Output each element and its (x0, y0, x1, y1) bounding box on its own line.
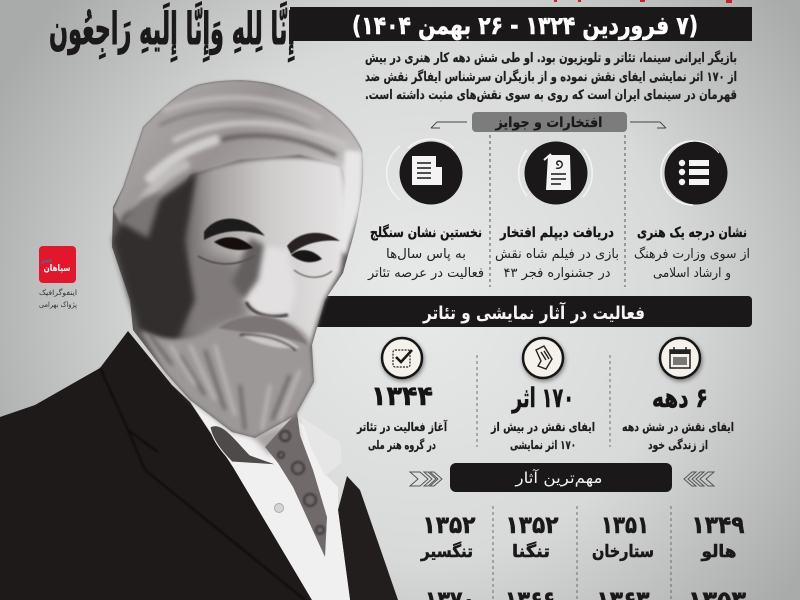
shirt (190, 400, 350, 600)
award description: بازی در فیلم شاه نقش (495, 247, 619, 262)
beard (140, 316, 314, 438)
award title: نشان درجه یک هنری (637, 225, 747, 241)
tiny red headline fragments (554, 0, 732, 3)
stat description: آغاز فعالیت در تئاتر (356, 419, 448, 434)
stat: 170 works (490, 338, 595, 452)
credit text: اینفوگرافیک (39, 288, 77, 297)
heading bar: key works: مهم‌ترین آثار (514, 469, 602, 487)
work: Tangsir: تنگسیر (420, 541, 473, 562)
work: Tangna (506, 511, 559, 562)
stat description: در گروه هنر ملی (368, 438, 436, 453)
icon: paper roll (387, 139, 462, 204)
face skin (160, 158, 345, 345)
work: Halo: ۱۳۴۹ (692, 511, 745, 539)
patterned tie (265, 412, 327, 557)
work: Tangsir: ۱۳۵۲ (422, 511, 476, 539)
calligraphy: condolence phrase: إِنَّا لِلهِ وَإِنَّا إِلَيهِ رَاجِعُون (49, 1, 295, 63)
logo: Sepahan Khabar (39, 246, 76, 283)
award description (495, 247, 619, 281)
icon: calendar (660, 338, 700, 378)
work: Tangna: تنگنا (512, 541, 550, 562)
dark left side of head (113, 172, 197, 345)
stat value: ۶ دهه (652, 383, 708, 414)
stat description (622, 420, 734, 453)
logo: Sepahan Khabar: سپاهان (44, 264, 71, 274)
award description: در جشنواره فجر ۴۳ (504, 266, 611, 281)
arrow: awards left (431, 122, 467, 128)
heading: awards: افتخارات و جوایز (495, 115, 602, 131)
right eyebrow and eye (287, 233, 340, 277)
award: diploma of honor (495, 142, 619, 281)
icon: scroll (523, 338, 563, 378)
heading bar: theatre activity: فعالیت در آثار نمایشی و تئاتر (422, 301, 645, 324)
works: second row years (425, 586, 746, 600)
stat: start year (356, 338, 448, 453)
portrait of the actor (0, 80, 398, 600)
logo: Sepahan Khabar: خبر (40, 256, 53, 264)
stat value: ۱۷۰ اثر (511, 383, 574, 414)
hair strands (136, 98, 345, 212)
arrow: awards right (630, 122, 666, 128)
head base (112, 80, 363, 438)
neck shadow (253, 420, 300, 455)
title bar with dates: (۷ فروردین ۱۳۲۴ - ۲۶ بهمن ۱۴۰۴) (352, 11, 698, 41)
hair (113, 80, 363, 240)
work: Setarkhan: ستارخان (592, 542, 654, 562)
stat value: ۱۳۴۴ (371, 381, 433, 412)
stat description (490, 420, 595, 452)
moustache and mouth (218, 316, 308, 350)
left eyebrow and eye (198, 219, 265, 264)
stat: six decades (622, 338, 734, 453)
work: Setarkhan (592, 511, 654, 562)
award description: و ارشاد اسلامی (653, 266, 731, 281)
award: art degree (634, 141, 750, 281)
work: Tangna: ۱۳۵۲ (506, 511, 559, 539)
award description: فعالیت در عرصه تئاتر (367, 266, 484, 281)
work: Halo (692, 511, 745, 562)
collar leaf (210, 426, 278, 465)
jacket right side (338, 476, 398, 600)
left cheek shading (185, 250, 250, 335)
stat description: ایفای نقش در بیش از (490, 420, 595, 434)
icon: document with quill (519, 142, 592, 204)
icon: list (661, 141, 728, 205)
button (274, 504, 284, 512)
award: Sangalaj medal (367, 139, 484, 281)
award title: دریافت دیپلم افتخار (499, 225, 614, 241)
award description: به پاس سال‌ها (386, 247, 466, 262)
icon: chevrons right (684, 472, 714, 486)
award title: نخستین نشان سنگلج (370, 224, 482, 241)
credit text: پژواک بهرامی (39, 300, 77, 309)
award description: از سوی وزارت فرهنگ (634, 246, 750, 262)
credit text (39, 288, 77, 309)
title bar with dates (290, 7, 752, 41)
biography paragraph (365, 50, 737, 103)
heading: awards (472, 112, 627, 132)
right temple hair (338, 150, 362, 255)
stat description: ایفای نقش در شش دهه (622, 420, 734, 434)
nose (232, 238, 296, 316)
work: Setarkhan: ۱۳۵۱ (601, 511, 649, 539)
heading bar: key works (450, 463, 672, 492)
award description (634, 246, 750, 281)
stat description (356, 419, 448, 453)
heading bar: theatre activity (300, 296, 752, 327)
lapel lines (100, 368, 305, 600)
work: Tangsir (420, 511, 476, 562)
icon: chevrons left (410, 472, 442, 486)
work: Halo: هالو (701, 542, 736, 562)
award description (367, 247, 484, 281)
icon: checkbox (382, 338, 422, 378)
stat description: ۱۷۰ اثر نمایشی (510, 438, 576, 452)
beard texture (150, 335, 300, 430)
jacket (0, 331, 312, 600)
stat description: از زندگی خود (648, 438, 708, 453)
